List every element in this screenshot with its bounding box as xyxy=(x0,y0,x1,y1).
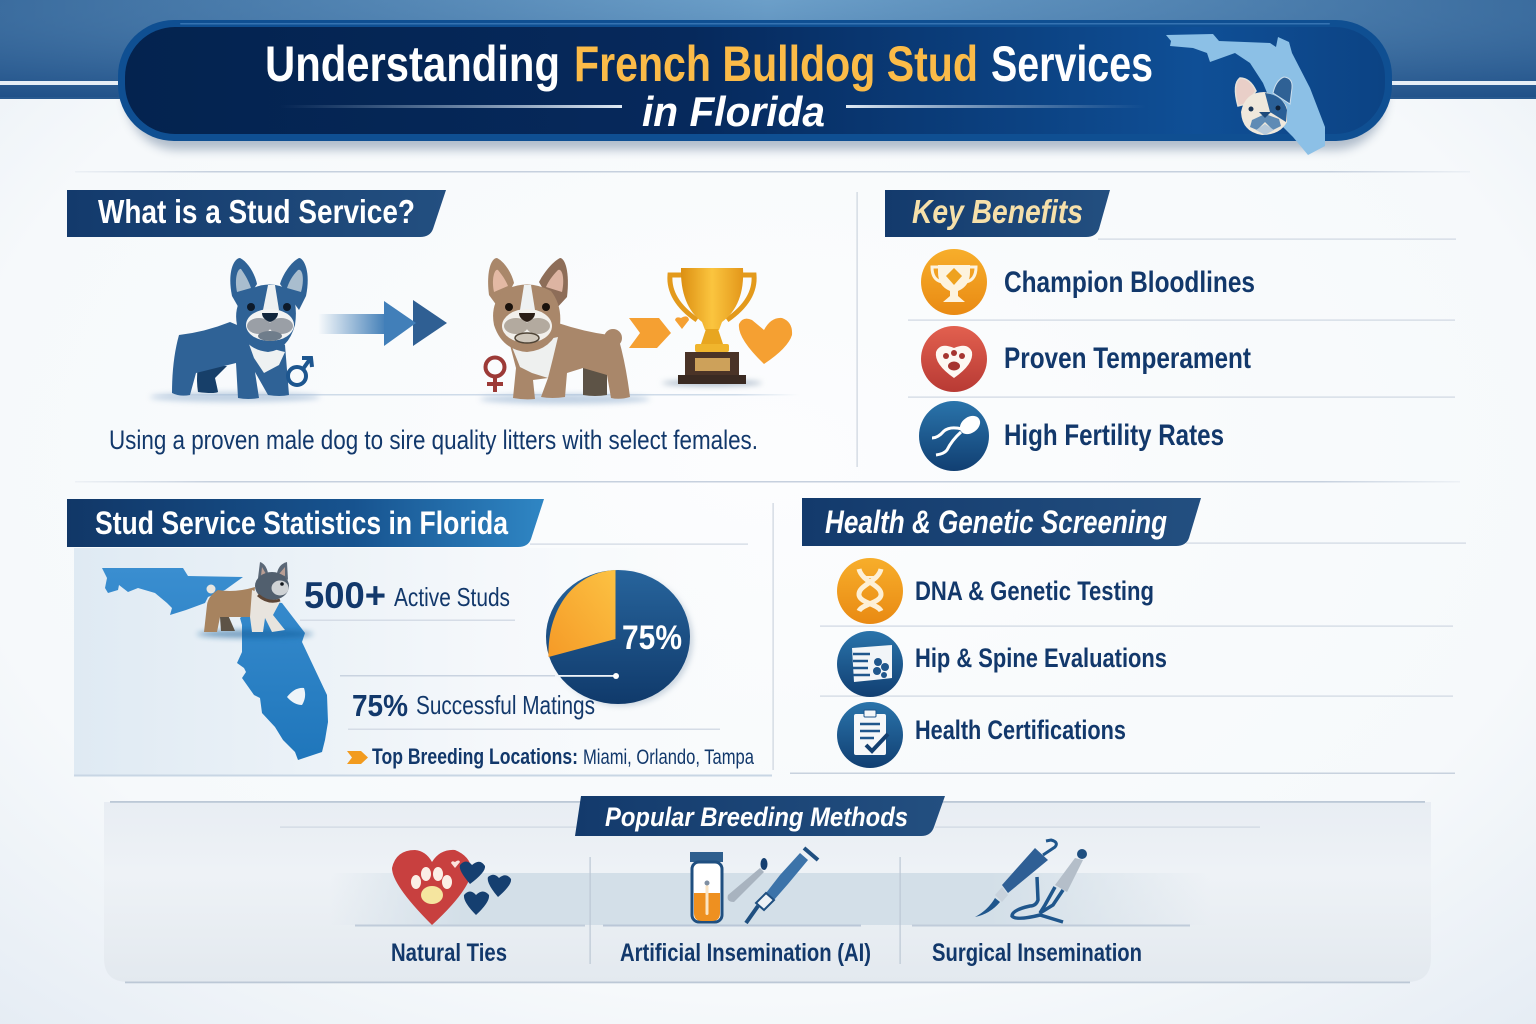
icon: trophy xyxy=(662,268,762,386)
icon: surgical tools xyxy=(975,840,1087,922)
heading: statistics xyxy=(67,499,544,547)
panel: health and genetic screening xyxy=(790,498,1466,774)
description text: Using a proven male dog to sire quality litters with select females. xyxy=(109,425,758,455)
heading: statistics: Stud Service Statistics in Florida xyxy=(95,505,508,541)
panel: what is a stud service xyxy=(67,190,800,455)
heading: health and genetic screening: Health & Genetic Screening xyxy=(825,504,1167,540)
icon: heart paw badge xyxy=(921,326,987,392)
icon: large heart xyxy=(739,318,792,364)
icon: DNA badge xyxy=(837,558,903,624)
icon: orange chevron xyxy=(629,318,671,348)
panel: popular breeding methods xyxy=(104,796,1431,983)
map: Florida xyxy=(102,568,328,760)
stat: 75% successful matings xyxy=(352,688,595,723)
text: natural ties: Natural Ties xyxy=(391,939,507,967)
heading: health and genetic screening xyxy=(802,498,1201,546)
title line two: in Florida xyxy=(642,88,825,135)
icon: female symbol xyxy=(486,358,504,392)
title banner xyxy=(118,20,1392,155)
stat: 500+ active studs: 500+ xyxy=(304,575,386,616)
top header band xyxy=(0,0,1536,99)
title line one: Understanding xyxy=(265,36,560,92)
icon: dog on map xyxy=(197,562,313,638)
stat: 500+ active studs: Active Studs xyxy=(394,582,510,612)
icon: Florida map with bulldog head xyxy=(1166,34,1325,155)
arrow xyxy=(318,300,447,346)
title highlight: French Bulldog Stud xyxy=(574,36,978,92)
heading: key benefits: Key Benefits xyxy=(912,193,1083,230)
heading: what is a stud service xyxy=(67,190,446,237)
text: top breeding locations: Miami, Orlando, Tampa xyxy=(583,746,754,769)
icon: hip and spine badge xyxy=(837,631,903,697)
stat: 75% successful matings: Successful Matings xyxy=(416,690,595,720)
icon: female brown bulldog xyxy=(488,258,630,399)
icon: male blue bulldog xyxy=(172,258,308,399)
text: proven temperament: Proven Temperament xyxy=(1004,342,1251,375)
title end: Services xyxy=(991,36,1153,92)
divider lines xyxy=(75,171,1470,770)
stat: 500+ active studs xyxy=(304,575,510,616)
icon: certificate clipboard badge xyxy=(837,702,903,768)
icon: vial and syringe xyxy=(690,848,818,923)
panel: stud service statistics xyxy=(67,499,772,776)
icon: orange arrow xyxy=(347,751,368,764)
heading: popular breeding methods xyxy=(575,796,945,836)
heading: what is a stud service: What is a Stud Service? xyxy=(98,193,415,230)
icon: sperm badge xyxy=(919,401,989,471)
heading: popular breeding methods: Popular Breeding Methods xyxy=(605,802,908,832)
heading: key benefits xyxy=(885,190,1110,237)
stat: 75% successful matings: 75% xyxy=(352,688,408,723)
map: lake xyxy=(287,688,305,705)
chart: 75% pie: 75% xyxy=(622,619,682,657)
text: champion bloodlines: Champion Bloodlines xyxy=(1004,266,1255,299)
text: artificial insemination: Artificial Insemination (AI) xyxy=(620,939,871,967)
text: DNA testing: DNA & Genetic Testing xyxy=(915,576,1154,606)
icon: small heart xyxy=(675,316,689,329)
text: surgical insemination: Surgical Insemination xyxy=(932,939,1142,967)
text: top breeding locations: Top Breeding Locations: xyxy=(372,744,578,769)
text: high fertility rates: High Fertility Rates xyxy=(1004,419,1224,452)
panel: key benefits xyxy=(885,190,1456,471)
icon: trophy badge xyxy=(921,249,987,315)
icon: male symbol xyxy=(288,358,312,385)
text: hip and spine: Hip & Spine Evaluations xyxy=(915,643,1167,673)
chart: 75% pie xyxy=(546,570,693,706)
icon: heart with paw xyxy=(392,850,511,925)
text: health certifications: Health Certifications xyxy=(915,715,1126,745)
text: top breeding locations xyxy=(372,744,754,769)
